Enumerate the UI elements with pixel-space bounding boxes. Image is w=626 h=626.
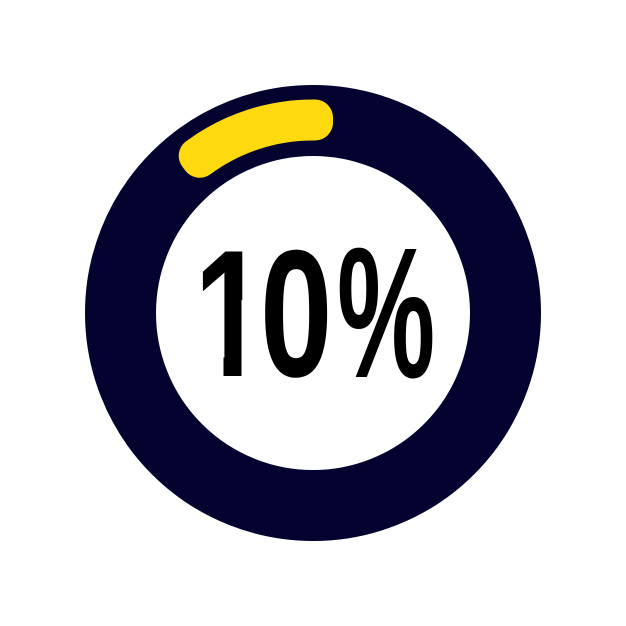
yellow 10% arc — [197, 117, 315, 160]
percentage label — [202, 248, 432, 378]
percentage label: 1 — [194, 213, 266, 415]
donut progress chart — [85, 85, 541, 541]
percentage label: % — [337, 210, 435, 417]
navy progress ring — [120, 120, 506, 506]
percentage label: 0 — [260, 213, 332, 415]
